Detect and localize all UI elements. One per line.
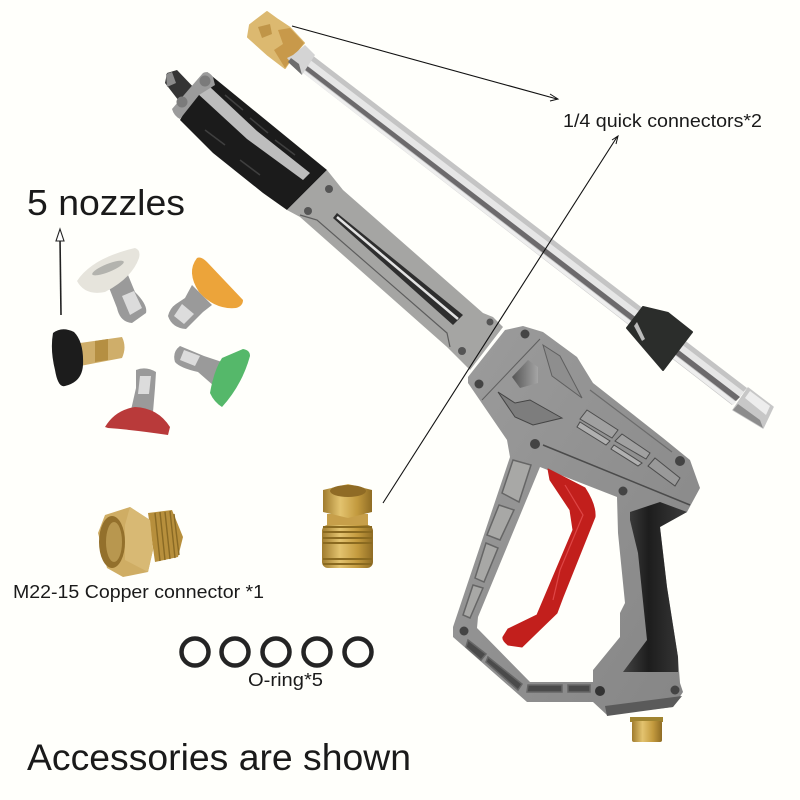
rod xyxy=(302,55,747,405)
black wand nut xyxy=(627,307,692,370)
label: O-ring: O-ring*5 xyxy=(248,670,323,690)
spray gun xyxy=(165,70,700,742)
nozzle: green xyxy=(174,346,250,407)
nozzle: red xyxy=(105,368,170,435)
loose brass quick connector xyxy=(322,484,373,568)
black rubber handle xyxy=(172,72,327,210)
black grip insert xyxy=(623,502,687,672)
O-rings xyxy=(182,638,372,666)
gun body panel details xyxy=(460,330,690,696)
gun barrel xyxy=(287,170,503,370)
red trigger xyxy=(503,469,595,647)
trigger highlight xyxy=(553,485,583,600)
barrel screw tip xyxy=(165,70,198,105)
arrow: to 5 nozzles xyxy=(56,229,64,315)
bottom brass fitting xyxy=(630,717,663,742)
frame window slots xyxy=(463,460,590,692)
heading: 5 nozzles: 5 nozzles xyxy=(27,182,185,223)
leader line: loose connector xyxy=(383,136,618,503)
gun body and frame xyxy=(453,326,700,715)
wand: lance with connector xyxy=(248,12,773,428)
label: copper connector: M22-15 Copper connector *1 xyxy=(13,581,264,602)
caption: Accessories are shown xyxy=(27,737,411,778)
label: quick connectors: 1/4 quick connectors*2 xyxy=(563,110,762,131)
brass quick connector on wand xyxy=(248,12,315,75)
wand end cap xyxy=(733,388,773,428)
nozzle: white xyxy=(77,248,146,323)
nozzle: black xyxy=(52,329,124,386)
nozzle: orange xyxy=(168,258,243,329)
bottom collar xyxy=(605,696,682,716)
M22-15 copper connector xyxy=(98,507,183,577)
leader line: wand connector xyxy=(292,26,558,101)
